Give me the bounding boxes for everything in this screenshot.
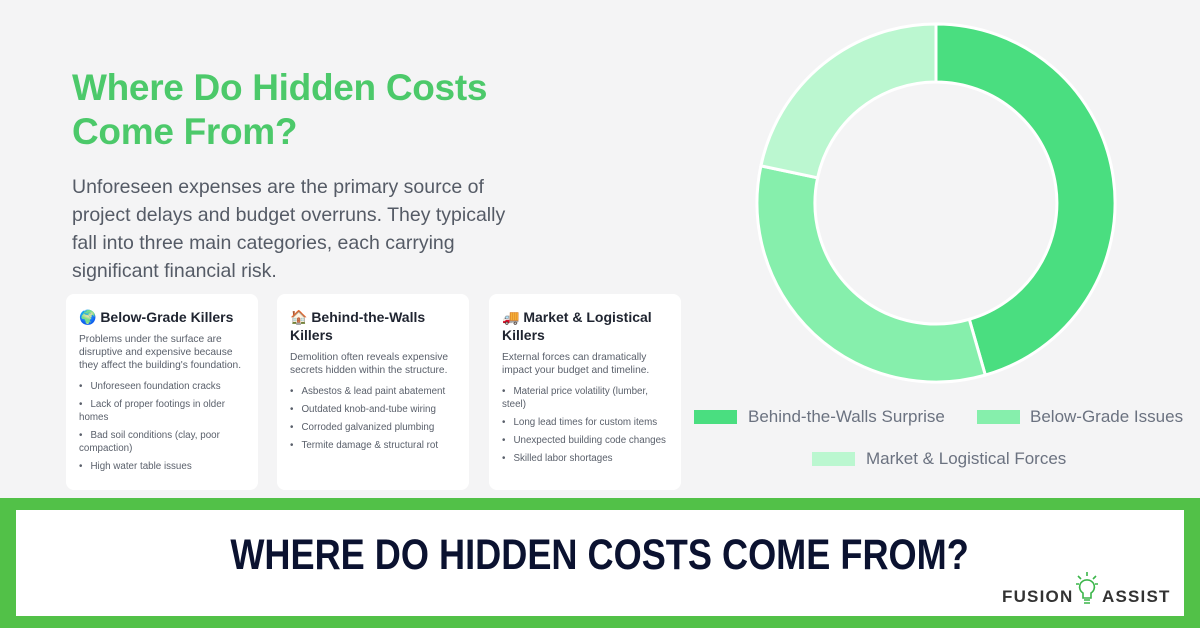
intro paragraph: Unforeseen expenses are the primary source of project delays and budget overruns. They typically fall into three main categories, each carrying significant financial risk. — [72, 176, 505, 282]
legend: Below-Grade Issues — [1030, 407, 1183, 426]
legend: Behind-the-Walls Surprise — [748, 407, 945, 426]
card: market & logistical killers: Material price volatility (lumber, steel) — [502, 386, 648, 410]
banner title: WHERE DO HIDDEN COSTS COME FROM? — [231, 531, 969, 579]
card: market & logistical killers: External forces can dramatically impact your budget and timeline. — [502, 352, 649, 376]
card: market & logistical killers: Long lead times for custom items — [513, 417, 657, 428]
title: Where Do Hidden Costs — [72, 67, 487, 108]
card: below-grade killers: Lack of proper footings in older homes — [79, 399, 225, 423]
card: behind-the-walls killers: Outdated knob-and-tube wiring — [301, 404, 436, 415]
card: below-grade killers: Problems under the surface are disruptive and expensive because they affect the building's foundation. — [79, 334, 241, 371]
card: below-grade killers: 🌍 Below-Grade Killers — [79, 309, 233, 325]
logo: fusion assist: ASSIST — [1102, 587, 1171, 606]
card: below-grade killers: High water table issues — [90, 461, 192, 472]
title: Come From? — [72, 111, 297, 152]
card: market & logistical killers — [489, 294, 681, 490]
card: market & logistical killers: Unexpected building code changes — [513, 435, 666, 446]
title — [72, 67, 487, 152]
card: below-grade killers — [66, 294, 258, 490]
legend: Market & Logistical Forces — [866, 449, 1066, 468]
card: behind-the-walls killers: Corroded galvanized plumbing — [301, 422, 434, 433]
card: behind-the-walls killers: Demolition often reveals expensive secrets hidden within the structure. — [290, 352, 448, 376]
card: market & logistical killers: 🚚 Market & Logistical Killers — [502, 309, 652, 343]
donut chart — [756, 22, 1116, 384]
card: market & logistical killers: Skilled labor shortages — [513, 453, 613, 464]
card: behind-the-walls killers: Asbestos & lead paint abatement — [301, 386, 445, 397]
card: behind-the-walls killers: 🏠 Behind-the-Walls Killers — [290, 309, 425, 343]
card: below-grade killers: Unforeseen foundation cracks — [90, 381, 221, 392]
bottom banner — [0, 498, 1200, 628]
card: behind-the-walls killers: Termite damage & structural rot — [301, 440, 438, 451]
card: below-grade killers: Bad soil conditions (clay, poor compaction) — [79, 430, 220, 454]
legend — [694, 407, 1183, 468]
card: behind-the-walls killers — [277, 294, 469, 490]
logo: fusion assist: FUSION — [1002, 587, 1073, 606]
logo: fusion assist — [1002, 572, 1171, 606]
